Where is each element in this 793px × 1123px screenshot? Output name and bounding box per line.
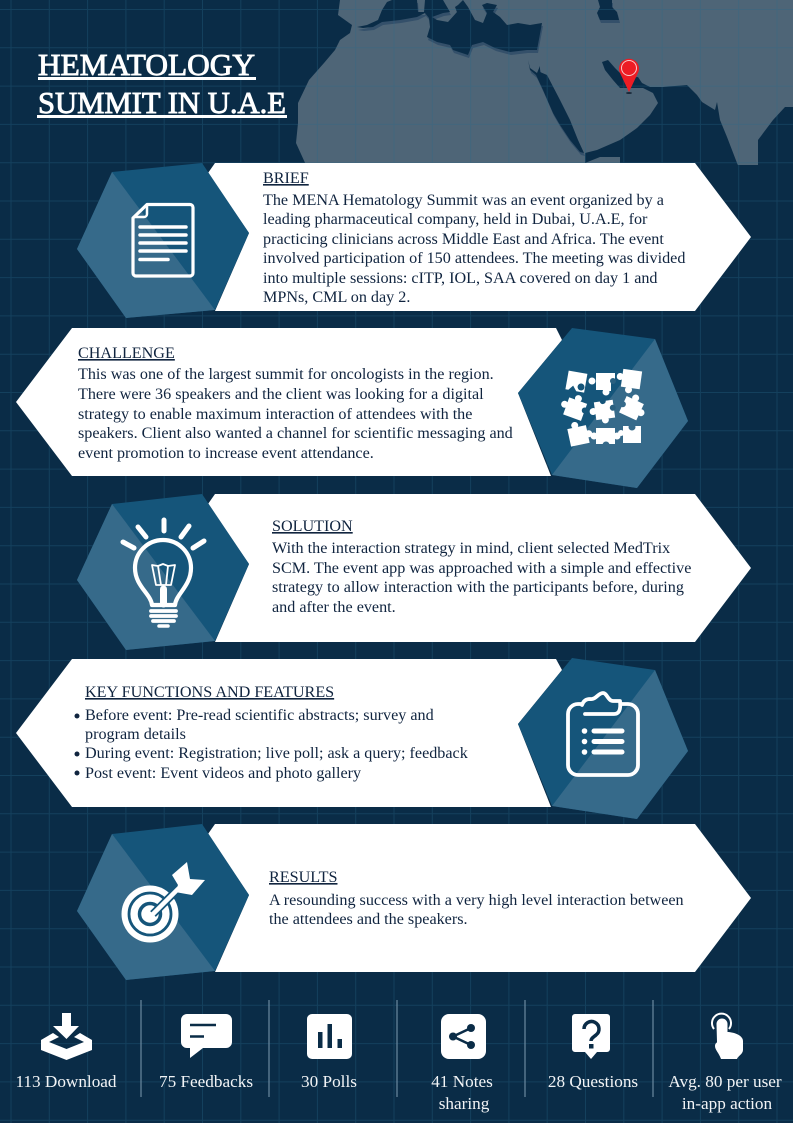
icon: download (41, 1013, 92, 1060)
solution text (272, 540, 691, 616)
solution text: SCM. The event app was approached with a simple and effective (272, 560, 691, 577)
brief text: into multiple sessions: cITP, IOL, SAA covered on day 1 and (263, 270, 658, 287)
stat: notes sharing: 41 Notes (431, 1072, 493, 1091)
panel: key functions and features (16, 658, 688, 819)
features list: program details (85, 726, 186, 743)
icon: share (441, 1014, 486, 1059)
challenge text: speakers. Client also wanted a channel for scientific messaging and (78, 425, 513, 442)
results heading: RESULTS (269, 869, 337, 886)
stat: downloads (15, 1013, 117, 1091)
panel: results (77, 824, 751, 980)
stat: in-app action: in-app action (682, 1094, 773, 1113)
icon: puzzle pieces (558, 368, 650, 448)
brief heading: BRIEF (263, 170, 309, 187)
icon: target with arrow (122, 862, 205, 942)
icon: speech bubble (181, 1014, 232, 1058)
title: SUMMIT IN U.A.E (38, 85, 286, 120)
results text: the attendees and the speakers. (269, 911, 468, 928)
solution hexagon (77, 494, 249, 650)
stat: polls: 30 Polls (301, 1072, 357, 1091)
brief hexagon (77, 163, 249, 318)
solution text: and after the event. (272, 599, 396, 616)
features heading: KEY FUNCTIONS AND FEATURES (85, 684, 334, 701)
challenge hexagon (518, 328, 688, 488)
brief text: MPNs, CML on day 2. (263, 289, 410, 306)
challenge banner (16, 328, 562, 476)
solution text: With the interaction strategy in mind, client selected MedTrix (272, 540, 670, 557)
panel: challenge (16, 328, 688, 488)
icon: bar chart (307, 1014, 352, 1059)
solution text: strategy to allow interaction with the participants before, during (272, 579, 684, 596)
stat: in-app action: Avg. 80 per user (668, 1072, 782, 1091)
features list: During event: Registration; live poll; ask a query; feedback (85, 745, 469, 762)
solution banner (208, 494, 751, 642)
stat: notes sharing: sharing (439, 1094, 490, 1113)
title (37, 47, 287, 120)
icon: clipboard (568, 693, 638, 775)
challenge heading: CHALLENGE (78, 345, 175, 362)
results text (269, 892, 684, 928)
brief text: The MENA Hematology Summit was an event organized by a (263, 192, 664, 209)
features list: Before event: Pre-read scientific abstracts; survey and (85, 707, 434, 724)
map of Africa, Middle East and India (296, 0, 793, 170)
stat: in-app action (668, 1014, 782, 1113)
challenge text: There were 36 speakers and the client was looking for a digital (78, 386, 484, 403)
results text: A resounding success with a very high level interaction between (269, 892, 684, 909)
brief text: practicing clinicians across Middle East and Africa. The event (263, 231, 664, 248)
features banner (16, 659, 562, 807)
brief text (263, 192, 685, 306)
stat: questions (548, 1014, 638, 1091)
icon: light bulb (123, 520, 204, 626)
stat: questions: 28 Questions (548, 1072, 638, 1091)
brief banner (208, 163, 751, 311)
stat: feedbacks: 75 Feedbacks (159, 1072, 253, 1091)
challenge text: event promotion to increase event attendance. (78, 445, 374, 462)
challenge text: This was one of the largest summit for oncologists in the region. (78, 366, 494, 383)
icon: document (133, 204, 193, 276)
stat: feedbacks (159, 1014, 253, 1091)
stat: notes sharing (431, 1014, 493, 1113)
brief text: involved participation of 150 attendees. The meeting was divided (263, 250, 685, 267)
features hexagon (518, 658, 688, 819)
features list: Post event: Event videos and photo gallery (85, 765, 361, 782)
results hexagon (77, 824, 249, 980)
title: HEMATOLOGY (38, 47, 255, 82)
challenge text: strategy to enable maximum interaction of attendees with the (78, 406, 472, 423)
solution heading: SOLUTION (272, 518, 353, 535)
stat: polls (301, 1014, 357, 1091)
brief text: leading pharmaceutical company, held in Dubai, U.A.E, for (263, 211, 648, 228)
features list (74, 707, 469, 782)
panel: solution (77, 494, 751, 650)
panel: brief (77, 163, 751, 318)
stat: downloads: 113 Download (15, 1072, 117, 1091)
icon: question bubble (572, 1014, 610, 1059)
map pin (619, 59, 639, 94)
icon: tapping hand (712, 1014, 743, 1059)
results banner (208, 824, 751, 972)
challenge text (78, 366, 513, 462)
